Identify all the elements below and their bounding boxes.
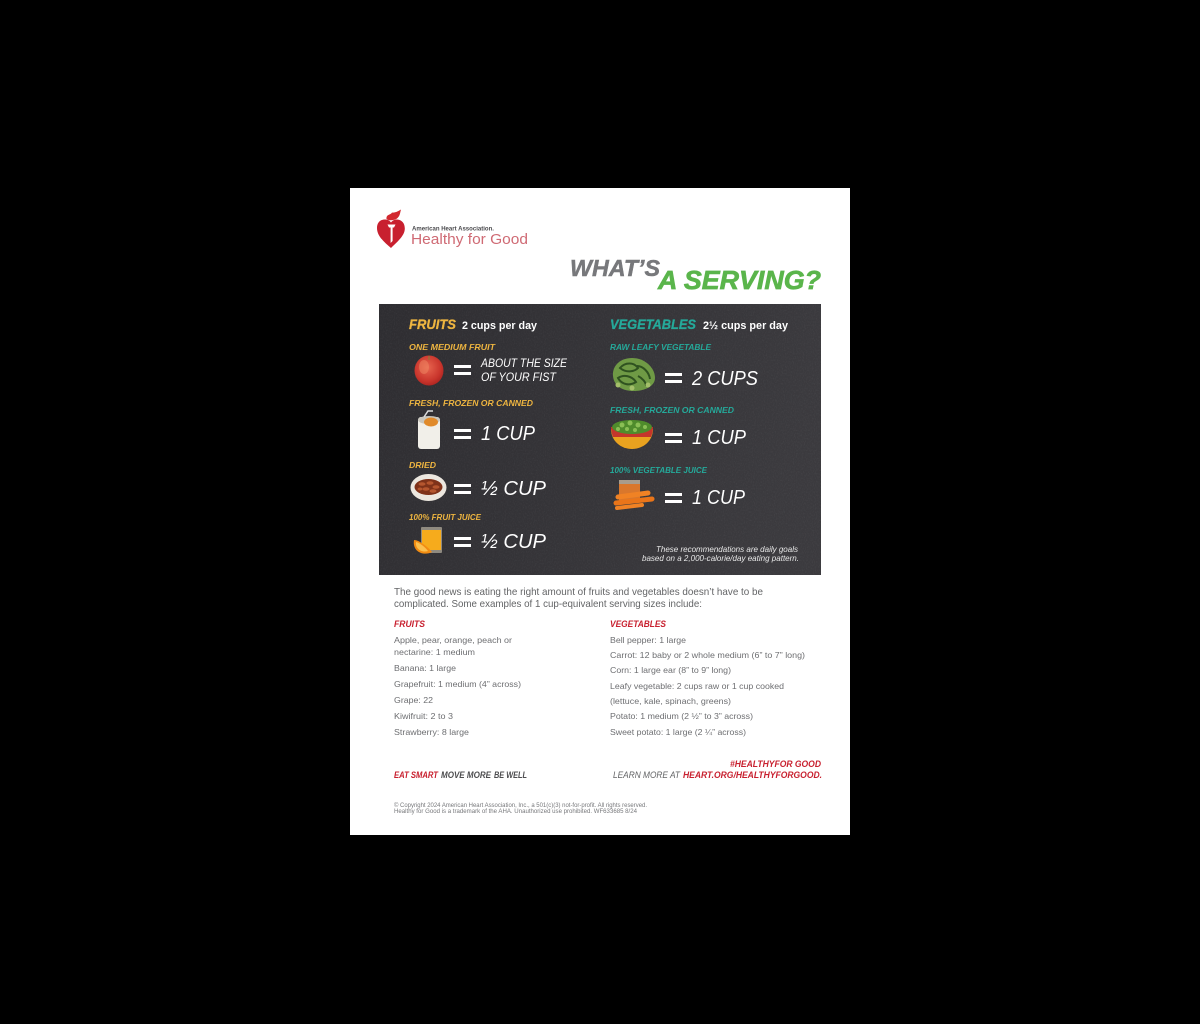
text: half cup: ½ CUP xyxy=(481,478,547,500)
list: fruits: Banana: 1 large xyxy=(394,663,456,673)
equals sign xyxy=(454,429,471,439)
tagline: eat smart move more be well: BE WELL xyxy=(494,770,527,781)
text: 1 cup: 1 CUP xyxy=(692,427,747,449)
logo text: Healthy for Good: Healthy for Good xyxy=(411,231,528,248)
item: dried fruit xyxy=(409,460,547,501)
item: fresh, frozen or canned fruit xyxy=(409,398,536,449)
text: 1 cup: 1 CUP xyxy=(692,487,746,509)
equals sign xyxy=(454,537,471,547)
page: white sheet xyxy=(350,188,850,835)
equals sign xyxy=(454,365,471,375)
heading: fruits: 2 cups per day xyxy=(462,320,538,332)
title line: A SERVING?: A SERVING? xyxy=(657,265,821,295)
list: vegetables: Carrot: 12 baby or 2 whole medium (6” to 7” long) xyxy=(610,650,805,660)
logo text: American Heart Association: American Heart Association. xyxy=(412,226,494,232)
title xyxy=(570,255,821,295)
call to action: learn more: #HEALTHYFOR GOOD xyxy=(730,759,821,770)
text: about the size of your fist xyxy=(480,356,568,384)
list: fruits: FRUITS xyxy=(394,619,425,629)
icon: bowl of dried fruit xyxy=(410,474,446,501)
list: vegetables: Bell pepper: 1 large xyxy=(610,635,686,645)
item: fruit juice: 100% FRUIT JUICE xyxy=(409,512,481,522)
panel: daily serving chalkboard xyxy=(379,304,821,575)
equals sign xyxy=(665,493,682,503)
tagline: eat smart move more be well: EAT SMART xyxy=(394,770,439,781)
tagline: eat smart move more be well: MOVE MORE xyxy=(441,770,492,781)
icon: bowl of greens xyxy=(611,420,653,449)
text: half cup: ½ CUP xyxy=(481,531,547,553)
copyright: Healthy for Good is a trademark of the AHA. Unauthorized use prohibited. WF633685 8/24 xyxy=(394,809,638,815)
list: fruits: Apple, pear, orange, peach or xyxy=(394,635,512,645)
list: fruits: Grapefruit: 1 medium (4” across) xyxy=(394,679,521,689)
list: fruits: Grape: 22 xyxy=(394,695,433,705)
list: fruits xyxy=(394,619,521,737)
item: raw leafy vegetable xyxy=(610,342,759,391)
text block: intro xyxy=(394,586,763,610)
equals sign xyxy=(665,373,682,383)
item: vegetable juice xyxy=(610,465,746,509)
item: one medium fruit: ONE MEDIUM FRUIT xyxy=(409,342,496,352)
list: vegetables: Leafy vegetable: 2 cups raw or 1 cup cooked xyxy=(610,681,784,691)
text: about the size of your fist: OF YOUR FIST xyxy=(481,370,557,384)
item: dried fruit: DRIED xyxy=(409,460,436,470)
icon: apple xyxy=(414,356,444,386)
list: vegetables: (lettuce, kale, spinach, greens) xyxy=(610,696,731,706)
icon: lettuce xyxy=(613,358,655,391)
text: about the size of your fist: ABOUT THE SIZE xyxy=(480,356,568,370)
list: fruits: Kiwifruit: 2 to 3 xyxy=(394,711,453,721)
equals sign xyxy=(454,484,471,494)
item: fresh, frozen or canned vegetable xyxy=(610,405,747,449)
call to action: learn more: HEART.ORG/HEALTHYFORGOOD. xyxy=(683,770,822,781)
logo: American Heart Association Healthy for Good xyxy=(377,210,528,248)
list: vegetables: Potato: 1 medium (2 ½” to 3” across) xyxy=(610,711,753,721)
list: fruits: nectarine: 1 medium xyxy=(394,647,475,657)
icon: juice glass and orange xyxy=(414,527,442,554)
list: vegetables: Corn: 1 large ear (8” to 9” long) xyxy=(610,665,731,675)
heading: vegetables xyxy=(610,316,789,332)
copyright: © Copyright 2024 American Heart Association, Inc., a 501(c)(3) not-for-profit. All rights reserved. xyxy=(394,802,647,809)
tagline: eat smart move more be well xyxy=(394,770,527,781)
item: raw leafy vegetable: RAW LEAFY VEGETABLE xyxy=(610,342,711,352)
list: vegetables xyxy=(610,619,805,737)
title line: WHAT'S: WHAT’S xyxy=(570,255,660,281)
equals sign xyxy=(665,433,682,443)
list: vegetables: VEGETABLES xyxy=(610,619,666,629)
list: fruits: Strawberry: 8 large xyxy=(394,727,469,737)
note: daily goals xyxy=(642,544,799,563)
note: daily goals: based on a 2,000-calorie/day eating pattern. xyxy=(642,553,799,563)
item: one medium fruit xyxy=(409,342,568,386)
icon: carrot juice and carrots xyxy=(616,480,652,508)
note: daily goals: These recommendations are daily goals xyxy=(656,544,799,554)
item: fresh, frozen or canned fruit: FRESH, FROZEN OR CANNED xyxy=(409,398,533,408)
heading: fruits xyxy=(409,316,538,332)
text block: intro: complicated. Some examples of 1 cup-equivalent serving sizes include: xyxy=(394,598,702,610)
item: fresh, frozen or canned vegetable: FRESH, FROZEN OR CANNED xyxy=(610,405,734,415)
heading: fruits: FRUITS xyxy=(409,316,457,332)
text: 2 cups: 2 CUPS xyxy=(691,368,759,390)
heading: vegetables: VEGETABLES xyxy=(610,316,697,332)
list: vegetables: Sweet potato: 1 large (2 ¼” across) xyxy=(610,727,746,737)
text block: intro: The good news is eating the right amount of fruits and vegetables doesn’t have to be xyxy=(394,586,763,598)
heading: vegetables: 2½ cups per day xyxy=(703,320,789,332)
icon: can xyxy=(418,411,440,449)
item: fruit juice xyxy=(409,512,547,554)
call to action: learn more xyxy=(613,759,822,781)
call to action: learn more: LEARN MORE AT xyxy=(613,770,681,781)
text: 1 cup: 1 CUP xyxy=(481,423,536,445)
item: vegetable juice: 100% VEGETABLE JUICE xyxy=(610,465,707,475)
icon: heart and torch xyxy=(377,210,405,248)
copyright xyxy=(394,802,647,815)
